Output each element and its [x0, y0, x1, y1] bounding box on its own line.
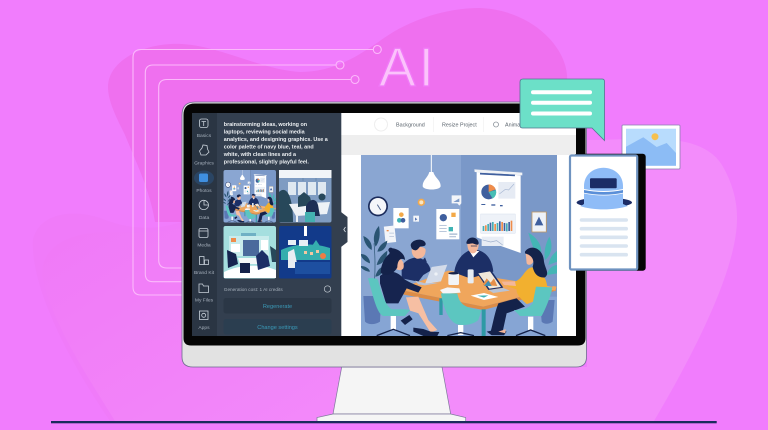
desk line: [51, 421, 717, 423]
sidebar navigation: Media: [197, 242, 211, 248]
circuit lines: [133, 46, 381, 295]
button: change settings: [224, 319, 332, 334]
sidebar navigation: Brand Kit: [194, 270, 215, 276]
thumbnail 1: [224, 170, 276, 222]
sidebar navigation: Apps: [198, 325, 210, 331]
generation cost: Generation cost: 1 AI credits: [224, 287, 283, 292]
toolbar: Animate: [505, 122, 525, 128]
generation cost: [224, 286, 331, 292]
sidebar navigation: Data: [199, 215, 209, 221]
sidebar navigation: My Files: [195, 297, 214, 303]
toolbar: [374, 117, 525, 132]
robot document card: [570, 154, 646, 271]
icon: chat bubble: [520, 79, 604, 140]
button: regenerate: [224, 298, 332, 314]
prompt text: analytics, and designing graphics. Use a: [224, 137, 329, 143]
sidebar navigation: Basics: [197, 133, 212, 139]
monitor stand: [317, 367, 466, 422]
thumbnail 3: [224, 226, 276, 278]
toolbar: Resize Project: [442, 122, 477, 128]
prompt text: white, with clean lines and a: [223, 152, 297, 158]
toolbar: Background: [396, 122, 425, 128]
prompt text: laptops, reviewing social media: [224, 130, 306, 136]
button: change settings: Change settings: [257, 325, 298, 331]
text lines: [580, 218, 628, 256]
prompt text: brainstorming ideas, working on: [224, 122, 307, 128]
icon: landscape picture: [622, 125, 680, 169]
icon: robot head: [577, 168, 632, 209]
button: regenerate: Regenerate: [263, 304, 292, 310]
main illustration: [361, 155, 557, 337]
sidebar navigation: Graphics: [194, 160, 214, 166]
thumbnail 4: [279, 226, 332, 278]
sidebar navigation: [194, 119, 215, 331]
monitor: [182, 102, 586, 367]
prompt text: professional, slightly playful feel.: [224, 160, 309, 166]
sidebar navigation: Photos: [196, 188, 212, 194]
heading: AI: AI: [379, 36, 437, 98]
prompt text: color palette of navy blue, teal, and: [224, 144, 314, 150]
thumbnail 2: [279, 170, 332, 222]
editor side panel: [192, 113, 348, 336]
screen: canvas area: [341, 113, 576, 337]
collapse tab: [341, 212, 348, 247]
